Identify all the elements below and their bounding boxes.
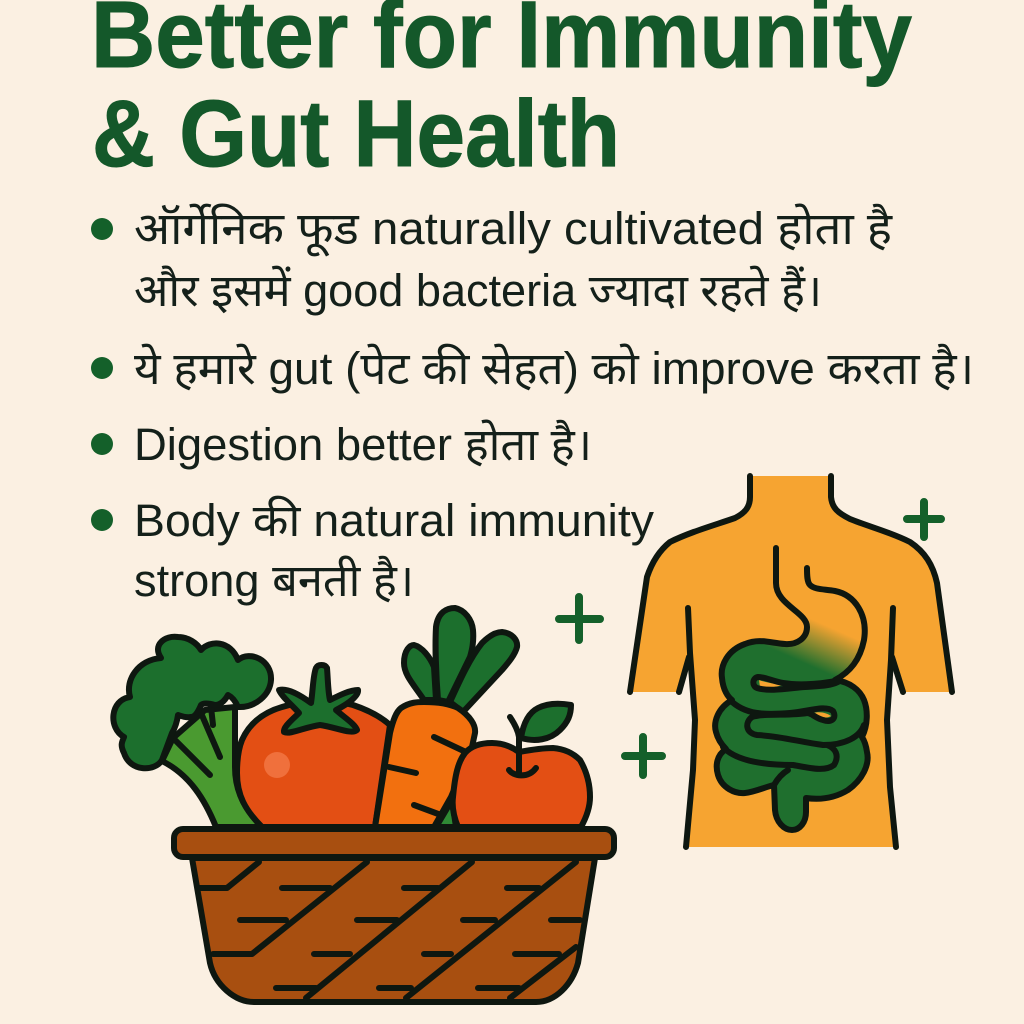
icon: vegetable basket <box>113 608 614 1002</box>
torso <box>630 476 952 847</box>
title: & Gut Health <box>92 81 620 187</box>
carrot <box>375 702 475 827</box>
bullet list <box>91 203 974 606</box>
bullet 4: Body की natural immunity <box>134 495 655 546</box>
title <box>91 0 912 187</box>
basket weave <box>198 862 580 998</box>
carrot tip <box>436 800 456 827</box>
icon: torso with digestive system <box>630 476 952 847</box>
carrot greens <box>404 645 436 700</box>
bullet 3: Digestion better होता है। <box>134 419 592 470</box>
basket rim <box>174 829 614 857</box>
icon: plus signs <box>559 502 941 775</box>
tomato <box>237 701 390 827</box>
intestines and stomach <box>715 548 868 830</box>
tomato calyx <box>279 665 358 733</box>
bullet 2: ये हमारे gut (पेट की सेहत) को improve करता है। <box>134 343 974 394</box>
broccoli stem <box>162 707 262 827</box>
bullet 4 <box>91 495 655 606</box>
bullet 1: और इसमें good bacteria ज्यादा रहते हैं। <box>134 265 822 316</box>
broccoli head <box>113 637 271 768</box>
bullet 1 <box>91 203 893 316</box>
apple <box>453 743 590 827</box>
bullet 4: strong बनती है। <box>134 555 414 606</box>
bullet 1: ऑर्गेनिक फूड naturally cultivated होता है <box>134 203 893 257</box>
apple leaf <box>521 704 571 740</box>
basket body <box>192 858 595 1002</box>
